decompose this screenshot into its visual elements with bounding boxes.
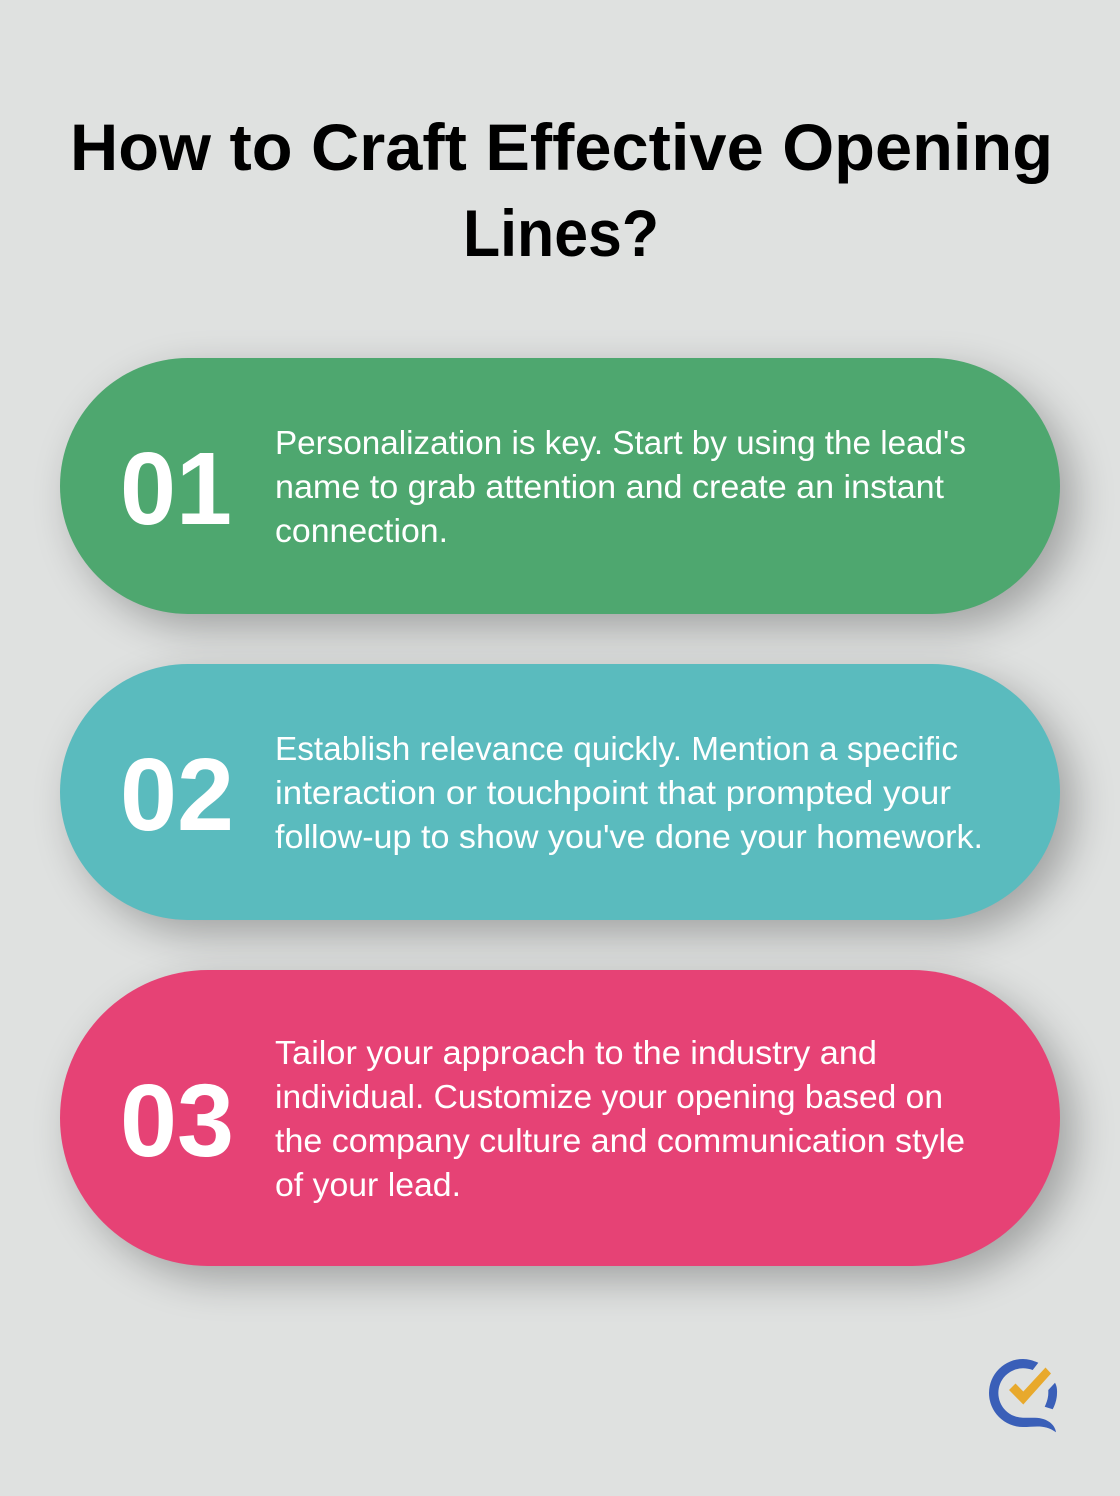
title — [70, 110, 1053, 270]
text: step 02 description: interaction or touchpoint that prompted your — [275, 774, 951, 811]
panel: step 03 — [60, 970, 1060, 1266]
panel: step 02 — [60, 664, 1060, 920]
text: step 01 description: name to grab attention and create an instant — [275, 468, 944, 505]
number 02: 02 — [120, 737, 234, 852]
text: step 02 description: follow-up to show you've done your homework. — [275, 818, 983, 855]
text: step 01 description: Personalization is key. Start by using the lead's — [275, 424, 966, 461]
text: step 03 description: of your lead. — [275, 1166, 461, 1203]
number 03: 03 — [120, 1063, 234, 1178]
text: step 03 description: the company culture and communication style — [275, 1122, 965, 1159]
text: step 03 description: individual. Customize your opening based on — [275, 1078, 943, 1115]
text: step 03 description — [275, 1034, 965, 1203]
panel: step 01 — [60, 358, 1060, 614]
title: Lines? — [463, 196, 659, 270]
text: step 03 description: Tailor your approach to the industry and — [275, 1034, 877, 1071]
title: How to Craft Effective Opening — [70, 110, 1053, 184]
text: step 01 description: connection. — [275, 512, 448, 549]
text: step 02 description — [275, 730, 983, 855]
text: step 01 description — [275, 424, 966, 549]
text: step 02 description: Establish relevance quickly. Mention a specific — [275, 730, 958, 767]
number 01: 01 — [120, 431, 232, 546]
